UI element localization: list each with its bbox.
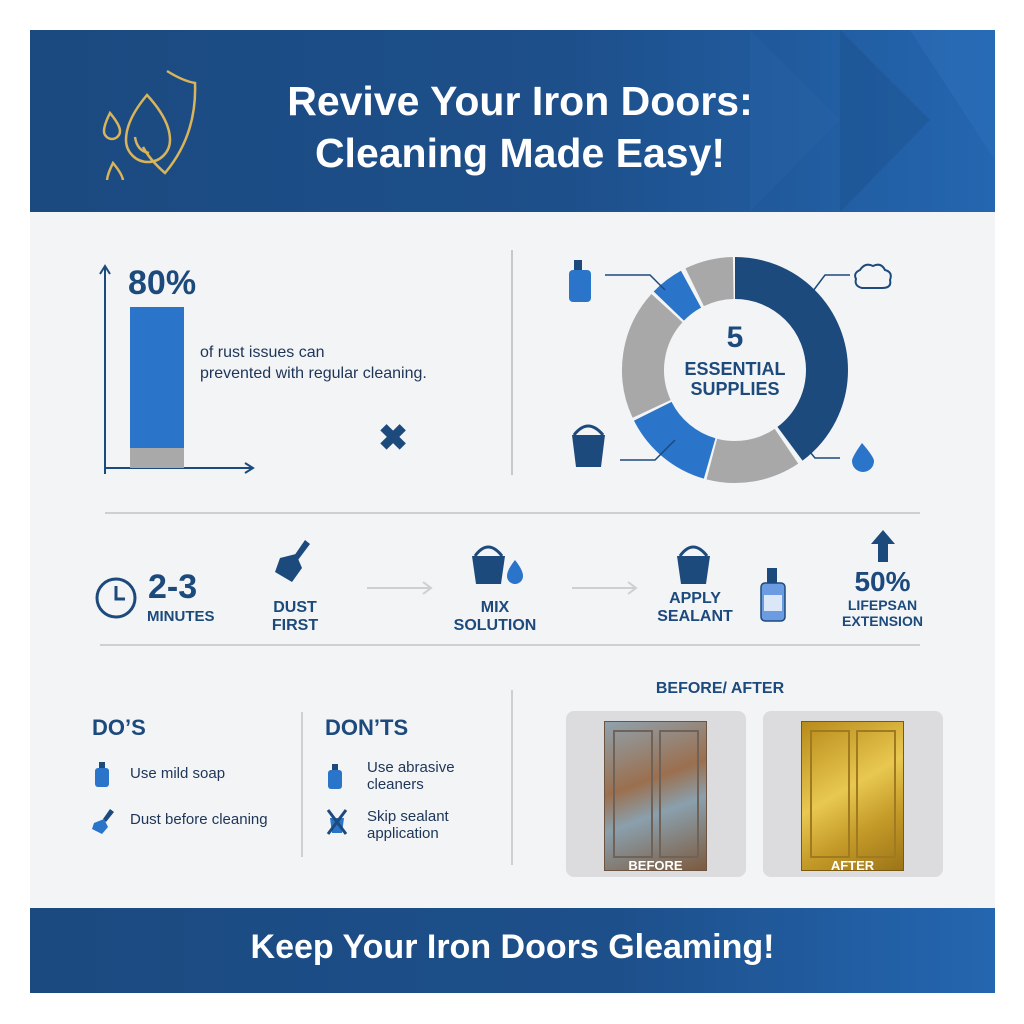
step dust first: FIRST: [272, 617, 318, 634]
step apply sealant: [657, 546, 786, 625]
divider: [511, 690, 513, 865]
stat 50% lifespan: EXTENSION: [842, 613, 923, 629]
step apply sealant: APPLY: [669, 590, 721, 607]
step apply sealant: SEALANT: [657, 608, 733, 625]
donut chart: 5: [727, 321, 743, 354]
icon: clock: [96, 578, 136, 618]
content background: [30, 212, 995, 908]
panel: after photo: AFTER: [831, 858, 874, 873]
item: skip sealant: application: [367, 825, 439, 842]
item: skip sealant: Skip sealant: [367, 808, 449, 825]
heading before/after: BEFORE/ AFTER: [656, 680, 784, 697]
footer banner: [30, 908, 995, 993]
stat text: of rust issues can: [200, 344, 324, 361]
header banner: [30, 30, 995, 212]
panel: bar chart 80%: [99, 264, 427, 474]
item: dust: [92, 809, 268, 834]
stat text: prevented with regular cleaning.: [200, 365, 427, 382]
donut chart: ESSENTIAL: [684, 359, 786, 379]
arrow: [367, 581, 432, 595]
divider: [105, 512, 920, 514]
panel: steps row: MINUTES: [147, 608, 214, 625]
panel: don'ts: [325, 715, 455, 842]
item: skip sealant: [326, 808, 449, 842]
step dust first: [272, 540, 318, 634]
footer text: Keep Your Iron Doors Gleaming!: [251, 928, 774, 966]
icon: drops and shield: [102, 70, 196, 180]
item: abrasive: [328, 759, 455, 793]
donut chart: SUPPLIES: [690, 379, 780, 399]
item: dust: Dust before cleaning: [130, 811, 268, 828]
donut chart: [569, 257, 892, 483]
item: mild soap: [95, 762, 225, 787]
panel: before photo: [566, 711, 746, 877]
panel: do's: [92, 715, 268, 834]
panel: before photo: BEFORE: [628, 858, 683, 873]
panel: do's: DO’S: [92, 715, 146, 740]
title: Revive Your Iron Doors:: [287, 78, 753, 124]
divider: [100, 644, 920, 646]
step mix solution: [454, 546, 536, 634]
stat 50% lifespan: 50%: [854, 566, 911, 597]
divider: [301, 712, 303, 857]
divider: [511, 250, 513, 475]
step mix solution: SOLUTION: [454, 617, 536, 634]
icon: cross: ✖: [378, 417, 408, 458]
title: Cleaning Made Easy!: [315, 130, 725, 176]
arrow: [572, 581, 638, 595]
item: abrasive: Use abrasive: [367, 759, 455, 776]
title: [287, 78, 753, 176]
stat 80%: 80%: [128, 264, 196, 302]
panel: don'ts: DON’TS: [325, 715, 408, 740]
stat 2-3 minutes: 2-3: [148, 568, 197, 606]
panel: after photo: [763, 711, 943, 877]
stat text: [200, 344, 427, 382]
step mix solution: MIX: [481, 599, 509, 616]
stat 50% lifespan: [842, 530, 923, 629]
item: abrasive: cleaners: [367, 776, 424, 793]
item: mild soap: Use mild soap: [130, 765, 225, 782]
stat 50% lifespan: LIFEPSAN: [848, 597, 917, 613]
panel: steps row: [96, 530, 923, 634]
step dust first: DUST: [273, 599, 317, 616]
